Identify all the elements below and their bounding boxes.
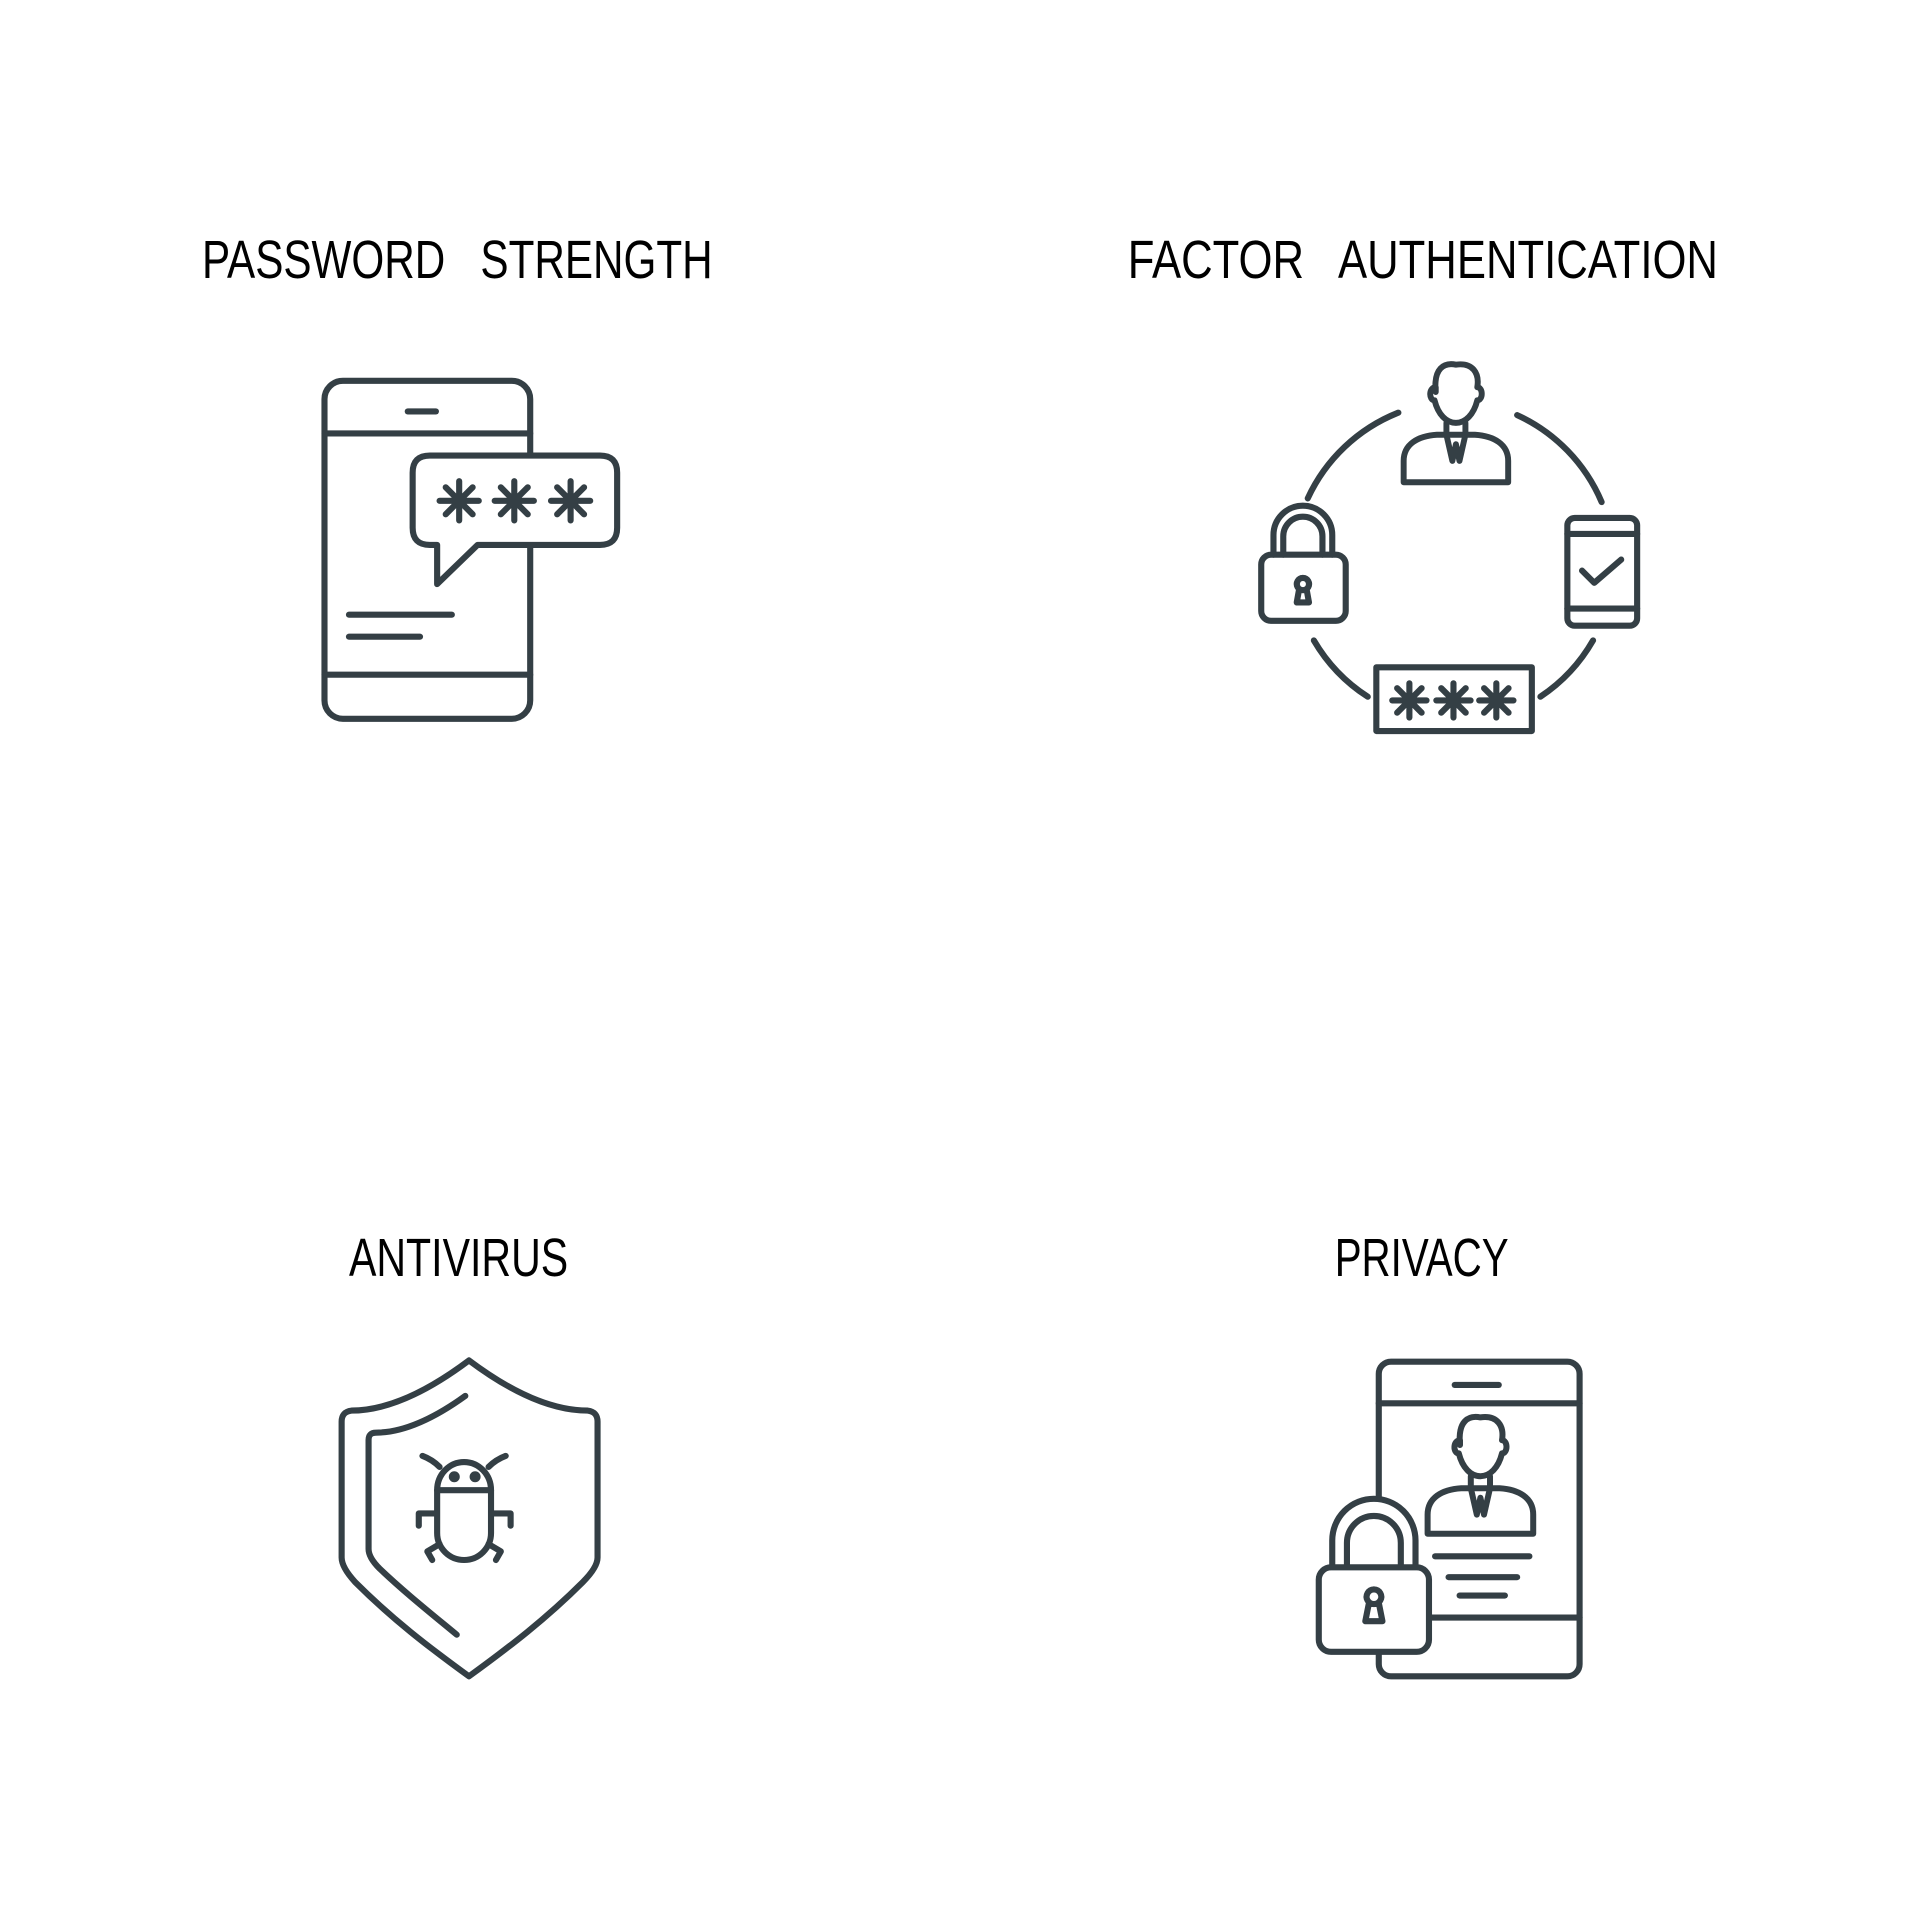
icon: privacy tablet with lock: [1319, 1362, 1580, 1676]
circle arcs: [1308, 413, 1602, 697]
title: password strength: PASSWORD STRENGTH: [202, 230, 713, 290]
icon: antivirus shield with bug: [342, 1360, 598, 1676]
icon: factor authentication cycle: [1261, 364, 1637, 731]
user: [1404, 364, 1508, 482]
title: privacy: PRIVACY: [1335, 1228, 1509, 1288]
phone with check: [1567, 518, 1637, 626]
password box: [1376, 667, 1532, 731]
title: antivirus: ANTIVIRUS: [349, 1228, 568, 1288]
profile: [1428, 1417, 1533, 1534]
lock: [1319, 1499, 1429, 1652]
speech bubble with asterisks: [413, 456, 617, 584]
bug: [419, 1456, 511, 1560]
title: factor authentication: FACTOR AUTHENTICATION: [1128, 230, 1718, 290]
lock: [1261, 506, 1346, 621]
icon: password strength phone: [324, 381, 617, 719]
